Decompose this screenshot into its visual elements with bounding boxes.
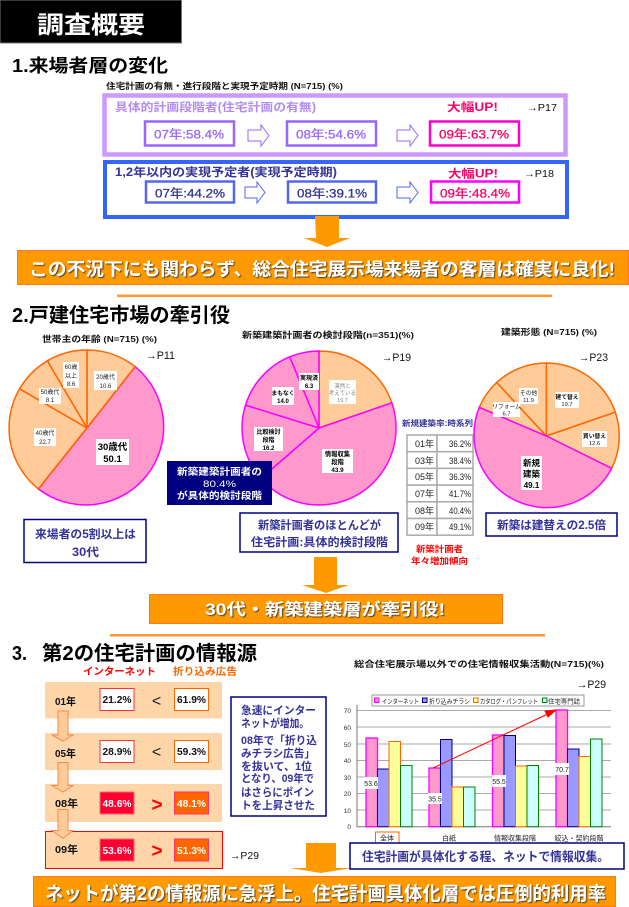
legend: bar chart: カタログ・パンフレット bbox=[480, 696, 538, 706]
banner: section 3 conclusion bbox=[34, 876, 616, 906]
callout: 住宅計画が具体化する程 bbox=[350, 843, 624, 869]
column labels: 折り込み広告 bbox=[173, 665, 237, 678]
panel: 具体的計画段階者: 大幅UP! bbox=[447, 100, 498, 114]
bar chart: information sources: 30 bbox=[344, 775, 351, 782]
heading: section 1: 1.来場者層の変化 bbox=[12, 56, 168, 76]
arrow: section 1 down bbox=[304, 216, 350, 247]
caption: building type pie: 建築形態 (N=715) (%) bbox=[501, 327, 597, 337]
page ref: P19: →P19 bbox=[382, 352, 411, 364]
banner: section 1 conclusion bbox=[18, 250, 628, 284]
callout: 急速にインターネットが増加: 08年で「折り込 bbox=[241, 733, 317, 747]
table: 新規建築率 time series: 03年 bbox=[415, 455, 434, 466]
pie chart: building type: その他 bbox=[520, 389, 537, 397]
pie chart: building type: 12.6 bbox=[589, 441, 600, 447]
table: 新規建築率 time series: 09年 bbox=[415, 521, 434, 532]
callout: 80.4% bbox=[167, 461, 272, 505]
table: 新規建築率 time series: 07年 bbox=[415, 488, 434, 499]
caption: planning stage pie: 新築建築計画者の検討段階(n=351)(%) bbox=[242, 330, 414, 340]
table heading: 新規建築率: 新規建築率:時系列 bbox=[402, 418, 473, 428]
callout: 新築計画者のほとんどが: 新築計画者のほとんどが bbox=[258, 518, 381, 532]
panel: internet vs flyer by year: 28.9% bbox=[102, 747, 132, 758]
callout: 新築計画者のほとんどが bbox=[240, 513, 398, 552]
panel: internet vs flyer by year: 48.1% bbox=[177, 799, 206, 810]
pie chart: age: 20歳代 bbox=[96, 373, 115, 381]
column labels bbox=[83, 665, 237, 678]
pie chart: building type: 建築 bbox=[523, 469, 540, 479]
pie chart: building type: 11.9 bbox=[523, 398, 534, 404]
pie chart: planning stage: 43.9 bbox=[331, 467, 344, 474]
legend: bar chart: 折り込みチラシ bbox=[429, 696, 470, 706]
panel: internet vs flyer by year: 61.9% bbox=[177, 695, 206, 706]
panel: internet vs flyer by year: 48.6% bbox=[102, 799, 132, 810]
pie chart: planning stage: 14.0 bbox=[277, 399, 289, 405]
callout: 新築は建替えの2.5倍 bbox=[486, 513, 617, 536]
caption: bar chart: 総合住宅展示場以外での住宅情報収集活動(N=715)(%) bbox=[354, 659, 604, 669]
pie chart: age: 40歳代 bbox=[36, 429, 54, 437]
banner: section 2 conclusion bbox=[150, 594, 502, 624]
pie chart: planning stage: まもなく bbox=[271, 390, 295, 397]
table: 新規建築率 time series: 01年 bbox=[415, 438, 434, 449]
banner: section 3 conclusion: ネットが第2の情報源に急浮上。住宅計画具体化層では圧倒的利用率 bbox=[45, 882, 606, 905]
callout: 住宅計画が具体化する程: 住宅計画が具体化する程、ネットで情報収集。 bbox=[362, 849, 609, 864]
callout: 80.4%: 新築建築計画者の bbox=[177, 466, 262, 478]
table: 新規建築率 time series: 36.2% bbox=[449, 439, 471, 449]
callout: 急速にインターネットが増加: となり、09年で bbox=[241, 771, 314, 785]
panel: internet vs flyer by year: < bbox=[152, 744, 161, 761]
caption: section 1: 住宅計画の有無・進行段階と実現予定時期 (N=715) (%) bbox=[106, 81, 343, 91]
pie chart: planning stage: 6.3 bbox=[305, 384, 314, 390]
arrow: section 2 down bbox=[302, 557, 349, 593]
title: 調査概要: 調査概要 bbox=[37, 12, 145, 39]
pie chart: age: 50.1 bbox=[103, 454, 122, 465]
legend: bar chart: 住宅専門誌 bbox=[548, 696, 580, 706]
callout: 80.4%: が具体的検討段階 bbox=[177, 490, 263, 502]
panel: internet vs flyer by year: 05年 bbox=[55, 747, 76, 760]
pie chart: age bbox=[9, 350, 164, 505]
callout: 急速にインターネットが増加: はさらにポイン bbox=[241, 786, 314, 799]
panel: internet vs flyer by year: 09年 bbox=[55, 843, 79, 856]
panel: 実現予定者 bbox=[105, 162, 567, 217]
panel: internet vs flyer by year bbox=[45, 682, 222, 868]
panel: 具体的計画段階者 bbox=[104, 96, 566, 154]
note: 年々増加傾向: 新築計画者 bbox=[416, 544, 464, 554]
table: 新規建築率 time series: 36.3% bbox=[449, 472, 471, 482]
pie chart: building type: 6.7 bbox=[502, 412, 511, 418]
panel: 実現予定者: 1,2年以内の実現予定者(実現予定時期) bbox=[115, 165, 337, 179]
banner: section 1 conclusion: この不況下にも関わらず、総合住宅展示場来場者の客層は確実に良化! bbox=[29, 260, 615, 280]
panel: 実現予定者: 07年:44.2% bbox=[155, 186, 225, 200]
caption: age pie: 世帯主の年齢 (N=715) (%) bbox=[42, 334, 157, 344]
pie chart: age: 以上 bbox=[65, 372, 77, 380]
bar chart: information sources: 40 bbox=[344, 758, 351, 765]
arrow: section 3 down bbox=[290, 843, 352, 873]
callout: 来場者の5割以上は30代: 30代 bbox=[72, 546, 100, 559]
bar chart: information sources: 55.5 bbox=[492, 779, 506, 786]
panel: 実現予定者: →P18 bbox=[524, 169, 554, 180]
panel: 具体的計画段階者: 具体的計画段階者(住宅計画の有無) bbox=[115, 100, 316, 114]
bar chart: information sources: 70 bbox=[344, 708, 351, 715]
page ref: P23: →P23 bbox=[579, 352, 608, 364]
panel: 実現予定者: 09年:48.4% bbox=[440, 186, 510, 200]
bar chart: information sources: 10 bbox=[344, 808, 351, 815]
panel: internet vs flyer by year: > bbox=[151, 841, 163, 862]
bar chart: information sources: 0 bbox=[347, 824, 351, 831]
panel: 具体的計画段階者: →P17 bbox=[527, 103, 557, 114]
table: 新規建築率 time series: 05年 bbox=[415, 471, 434, 482]
panel: 実現予定者: 08年:39.1% bbox=[297, 186, 367, 200]
panel: internet vs flyer by year: > bbox=[151, 795, 163, 816]
pie chart: planning stage: 段階 bbox=[262, 436, 275, 444]
page ref: P29 right: →P29 bbox=[577, 679, 606, 691]
pie chart: building type: 買い替え bbox=[583, 432, 606, 440]
pie chart: age: 8.1 bbox=[46, 398, 55, 404]
bar chart: information sources: 35.5 bbox=[428, 796, 442, 804]
pie chart: planning stage bbox=[242, 351, 396, 505]
panel: 実現予定者: 大幅UP! bbox=[448, 166, 498, 180]
page ref: P29 left: →P29 bbox=[230, 850, 259, 862]
pie chart: building type: 建て替え bbox=[555, 393, 579, 401]
callout: 急速にインターネットが増加: を抜いて、1位 bbox=[241, 759, 312, 773]
table: 新規建築率 time series: 41.7% bbox=[449, 489, 471, 499]
heading: section 3: 第2の住宅計画の情報源 bbox=[42, 642, 257, 665]
panel: 具体的計画段階者: 09年:63.7% bbox=[439, 128, 509, 142]
panel: internet vs flyer by year: 59.3% bbox=[177, 747, 206, 758]
table: 新規建築率 time series: 49.1% bbox=[449, 522, 471, 532]
panel: internet vs flyer by year: 51.3% bbox=[177, 846, 206, 857]
pie chart: age: 22.7 bbox=[39, 440, 51, 446]
bar chart: information sources bbox=[344, 705, 611, 843]
title: 調査概要 bbox=[0, 0, 182, 43]
callout: 80.4%: 80.4% bbox=[203, 479, 237, 490]
pie chart: building type: 新規 bbox=[523, 458, 540, 468]
pie chart: planning stage: 19.7 bbox=[337, 398, 348, 404]
callout: 来場者の5割以上は30代 bbox=[24, 520, 146, 562]
pie chart: planning stage: 漠然と bbox=[334, 382, 351, 390]
bar chart: information sources: 60 bbox=[344, 725, 351, 732]
panel: internet vs flyer by year: < bbox=[152, 693, 161, 710]
table: 新規建築率 time series: 40.4% bbox=[449, 506, 471, 516]
callout: 急速にインターネットが増加: 急速にインター bbox=[241, 703, 316, 717]
bar chart: information sources: 70.7 bbox=[555, 767, 569, 774]
bar chart: information sources: 絞込・契約段階 bbox=[554, 834, 604, 842]
heading: section 3: 3. bbox=[12, 643, 27, 665]
pie chart: building type: リフォーム bbox=[492, 404, 521, 410]
bar chart: information sources: 全体 bbox=[380, 834, 394, 842]
bar chart: information sources: 50 bbox=[344, 742, 351, 749]
pie chart: planning stage: 実現済 bbox=[300, 374, 318, 382]
pie chart: planning stage: 情報収集 bbox=[325, 449, 351, 458]
pie chart: age: 10.6 bbox=[100, 384, 112, 390]
bar chart: information sources: 情報収集段階 bbox=[494, 834, 536, 842]
callout: 新築計画者のほとんどが: 住宅計画:具体的検討段階 bbox=[251, 535, 389, 549]
pie chart: age: 30歳代 bbox=[98, 441, 128, 453]
pie chart: planning stage: 比較検討 bbox=[256, 428, 281, 436]
bar chart: information sources: 白紙 bbox=[442, 834, 456, 842]
legend: bar chart bbox=[372, 695, 584, 706]
pie chart: age: 60歳 bbox=[65, 363, 77, 371]
panel: 具体的計画段階者: 08年:54.6% bbox=[296, 128, 366, 142]
pie chart: planning stage: 16.2 bbox=[263, 446, 275, 452]
callout: 急速にインターネットが増加: みチラシ広告」 bbox=[241, 746, 315, 760]
bar chart: information sources: 53.6 bbox=[364, 781, 378, 788]
callout: 急速にインターネットが増加: トを上昇させた bbox=[241, 799, 315, 812]
panel: internet vs flyer by year: 01年 bbox=[55, 695, 76, 708]
pie chart: planning stage: 考えている bbox=[329, 390, 356, 397]
pie chart: building type: 19.7 bbox=[561, 402, 573, 408]
panel: internet vs flyer by year: 53.6% bbox=[102, 846, 132, 857]
table: 新規建築率 time series: 38.4% bbox=[449, 456, 471, 466]
page ref: P11: →P11 bbox=[146, 350, 175, 362]
pie chart: age: 8.6 bbox=[67, 382, 76, 388]
table: 新規建築率 time series bbox=[407, 435, 473, 535]
pie chart: building type bbox=[474, 363, 619, 508]
bar chart: information sources: 20 bbox=[344, 791, 351, 798]
note: 年々増加傾向 bbox=[411, 544, 468, 566]
table: 新規建築率 time series: 08年 bbox=[415, 505, 434, 516]
pie chart: age: 50歳代 bbox=[41, 388, 59, 396]
callout: 急速にインターネットが増加 bbox=[231, 697, 326, 816]
column labels: インターネット bbox=[83, 666, 156, 678]
pie chart: building type: 49.1 bbox=[524, 481, 540, 490]
callout: 急速にインターネットが増加: ネットが増加。 bbox=[241, 716, 309, 730]
callout: 来場者の5割以上は30代: 来場者の5割以上は bbox=[35, 527, 137, 541]
panel: internet vs flyer by year: 08年 bbox=[55, 797, 79, 810]
note: 年々増加傾向: 年々増加傾向 bbox=[411, 556, 468, 566]
banner: section 2 conclusion: 30代・新築建築層が牽引役! bbox=[205, 599, 445, 619]
pie chart: planning stage: 段階 bbox=[331, 457, 344, 466]
legend: bar chart: インターネット bbox=[382, 696, 419, 706]
panel: internet vs flyer by year: 21.2% bbox=[102, 695, 132, 706]
heading: section 2: 2.戸建住宅市場の牽引役 bbox=[12, 304, 230, 327]
panel: 具体的計画段階者: 07年:58.4% bbox=[154, 128, 224, 142]
callout: 新築は建替えの2.5倍: 新築は建替えの2.5倍 bbox=[497, 518, 606, 532]
